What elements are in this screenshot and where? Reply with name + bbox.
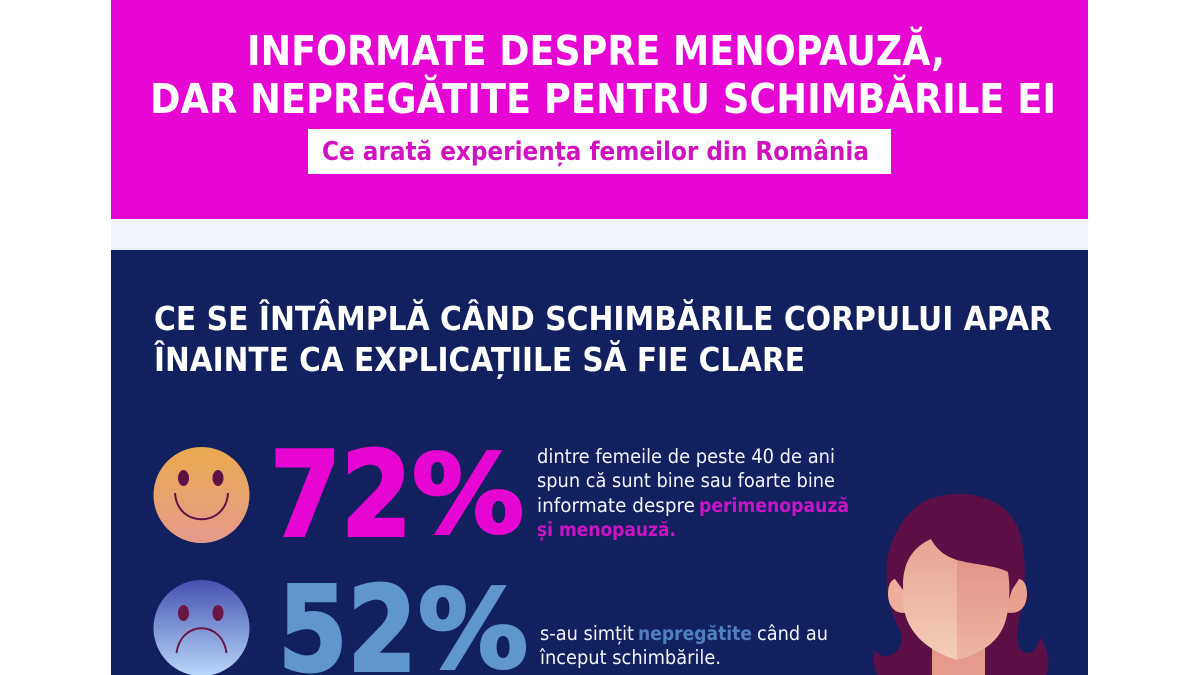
title: DAR NEPREGĂTITE PENTRU SCHIMBĂRILE EI: [150, 74, 1056, 123]
illustration: woman portrait: [874, 494, 1048, 675]
text: 72% description: spun că sunt bine sau foarte bine: [537, 469, 835, 492]
text: 72% description: și menopauză.: [537, 518, 676, 541]
text: 52% description: început schimbările.: [539, 646, 721, 669]
text: 52% description: [539, 622, 828, 669]
text: 72% description: [537, 445, 849, 541]
section heading: ÎNAINTE CA EXPLICAȚIILE SĂ FIE CLARE: [154, 339, 805, 379]
face right: [957, 560, 1009, 660]
icon: happy face: [154, 447, 250, 543]
title: INFORMATE DESPRE MENOPAUZĂ,: [247, 26, 945, 75]
separator band: [111, 219, 1088, 250]
title: [150, 26, 1056, 123]
navy panel: [111, 250, 1088, 675]
hair: [874, 494, 1048, 675]
header panel: [111, 0, 1088, 219]
stat: 72%: [270, 426, 524, 564]
text: 52% description: nepregătite: [638, 622, 752, 645]
face left: [903, 539, 957, 660]
subtitle box: Ce arată experiența femeilor din România: [322, 137, 869, 167]
text: 72% description: informate despre: [537, 494, 695, 517]
text: 72% description: dintre femeile de peste 40 de ani: [537, 445, 835, 468]
text: 52% description: când au: [757, 622, 828, 645]
section heading: [154, 298, 1052, 379]
section heading: CE SE ÎNTÂMPLĂ CÂND SCHIMBĂRILE CORPULUI APAR: [154, 298, 1052, 338]
icon: sad face: [154, 580, 250, 675]
neck: [932, 640, 985, 675]
subtitle box: [308, 129, 891, 174]
ears: [888, 579, 909, 613]
stat: 72%: 72: [270, 426, 412, 564]
text: 72% description: perimenopauză: [699, 494, 849, 517]
text: 52% description: s-au simțit: [540, 622, 634, 645]
stat: 52%: [278, 560, 528, 675]
stat: 72%: %: [412, 433, 524, 558]
